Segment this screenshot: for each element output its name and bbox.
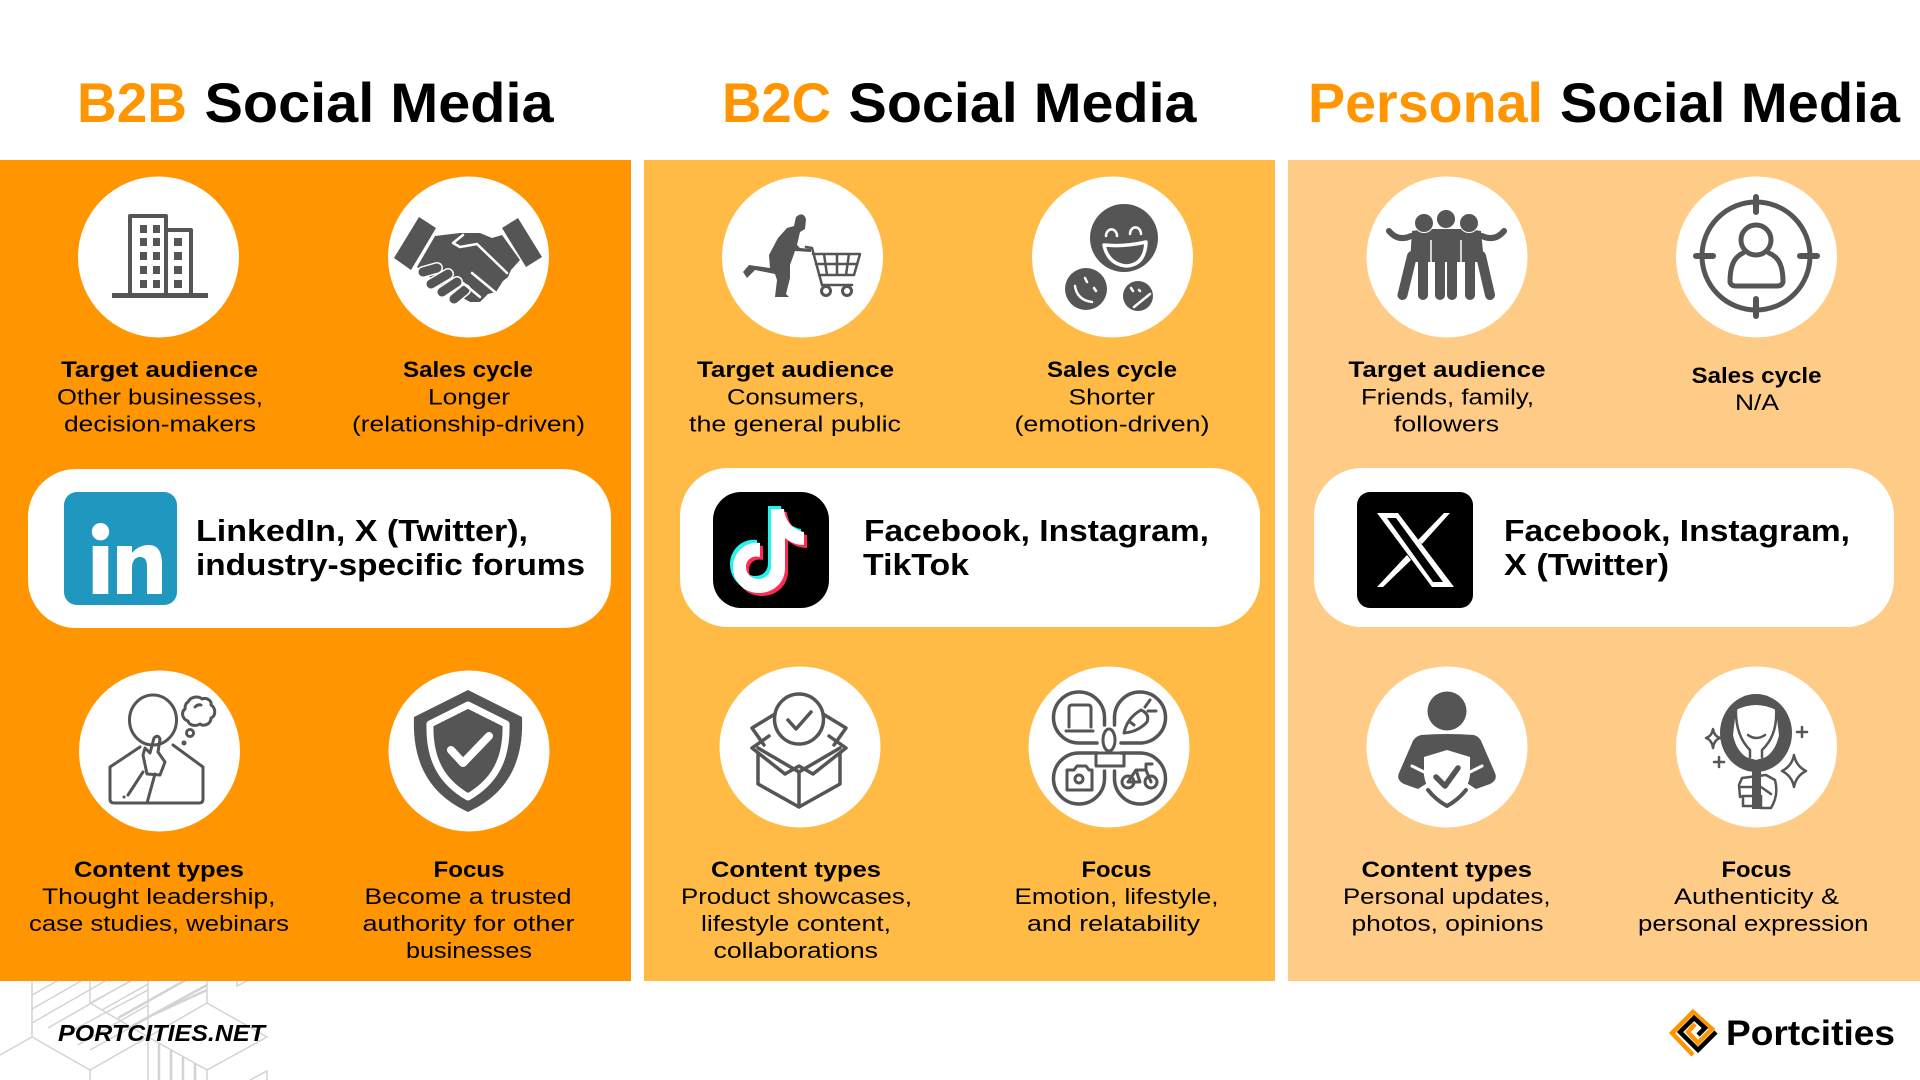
icon: handshake — [388, 176, 549, 338]
text: target audience: Target audience — [61, 357, 258, 382]
panel: B2C — [644, 160, 1275, 981]
text: platforms: X (Twitter) — [1504, 547, 1669, 582]
text: focus: authority for other — [362, 911, 575, 936]
text: content types — [1343, 857, 1550, 936]
icon: shopper with cart — [722, 176, 883, 338]
text: focus: Emotion, lifestyle, — [1014, 884, 1218, 909]
text: target audience — [57, 357, 263, 436]
title: Personal Social Media: Personal — [1308, 71, 1543, 134]
text: focus: Become a trusted — [364, 884, 572, 909]
text: focus: Focus — [434, 857, 504, 882]
text: target audience: followers — [1394, 412, 1499, 436]
text: sales cycle: N/A — [1735, 390, 1779, 415]
text: content types: photos, opinions — [1352, 911, 1544, 936]
text: platforms: industry-specific forums — [196, 547, 585, 582]
text: target audience: Consumers, — [727, 384, 865, 410]
logo: Portcities: Portcities — [1726, 1014, 1895, 1053]
pill: platforms — [28, 469, 611, 628]
logo: Portcities — [1672, 1012, 1895, 1055]
icon: target on person — [1676, 176, 1837, 338]
text: sales cycle: (emotion-driven) — [1014, 412, 1210, 436]
title: Personal Social Media: Social Media — [1560, 71, 1901, 134]
text: target audience: the general public — [689, 412, 901, 436]
icon: thinking person — [79, 670, 240, 832]
text: focus: businesses — [406, 938, 532, 963]
text: sales cycle — [352, 357, 585, 436]
pill: platforms — [1314, 468, 1894, 627]
title: B2C Social Media: B2C — [722, 71, 831, 134]
text: content types: Content types — [1362, 857, 1532, 882]
text: content types: Content types — [74, 857, 244, 882]
text: focus: personal expression — [1638, 911, 1868, 936]
text: focus: Focus — [1722, 857, 1792, 882]
icon: hand mirror — [1676, 666, 1837, 828]
text: platforms: LinkedIn, X (Twitter), — [196, 513, 528, 548]
text: content types: Product showcases, — [681, 884, 912, 909]
icon: office building — [78, 176, 239, 338]
text: content types — [681, 857, 912, 963]
text: content types: collaborations — [714, 938, 878, 963]
text: content types: Personal updates, — [1343, 884, 1550, 909]
text: sales cycle: (relationship-driven) — [352, 412, 585, 436]
text: content types: Thought leadership, — [42, 884, 276, 909]
text: platforms: TikTok — [863, 547, 970, 582]
title: B2B Social Media: B2B — [77, 71, 187, 134]
text: sales cycle — [1014, 357, 1210, 436]
icon: lifestyle person with four interests — [1028, 666, 1190, 828]
icon: smiley faces — [1032, 176, 1193, 338]
text: sales cycle: Sales cycle — [403, 357, 533, 382]
text: sales cycle: Sales cycle — [1047, 357, 1177, 382]
title: B2C Social Media: Social Media — [848, 71, 1197, 134]
text: target audience: Other businesses, — [57, 384, 263, 410]
icon: shield check — [388, 670, 550, 832]
text: focus: Focus — [1082, 857, 1152, 882]
icon: group of friends — [1366, 176, 1528, 338]
text: platforms — [863, 513, 1209, 582]
text: content types: lifestyle content, — [701, 911, 891, 936]
pill: platforms — [680, 468, 1260, 627]
text: focus — [1014, 857, 1218, 936]
text: platforms: Facebook, Instagram, — [864, 513, 1209, 548]
text: focus — [1638, 857, 1868, 936]
text: target audience: Target audience — [697, 357, 894, 382]
text: platforms — [1504, 513, 1850, 582]
text: focus: Authenticity & — [1674, 884, 1839, 909]
footer: website: PORTCITIES.NET — [58, 1020, 267, 1046]
title: B2B Social Media: Social Media — [204, 71, 554, 134]
text: focus: and relatability — [1027, 911, 1201, 936]
icon: product box — [720, 666, 880, 828]
text: target audience: decision-makers — [64, 412, 256, 436]
text: target audience: Friends, family, — [1361, 384, 1534, 410]
text: platforms: Facebook, Instagram, — [1504, 513, 1850, 548]
panel: Personal — [1288, 160, 1920, 981]
panel: B2B — [0, 160, 631, 981]
text: content types: Content types — [711, 857, 881, 882]
text: focus — [362, 857, 575, 963]
title: Personal Social Media — [1308, 71, 1901, 134]
text: platforms — [196, 513, 585, 582]
icon: TikTok — [713, 492, 829, 608]
icon: person holding shield — [1366, 666, 1528, 828]
text: content types: case studies, webinars — [29, 911, 289, 936]
text: sales cycle: Longer — [428, 384, 511, 410]
icon: X — [1357, 492, 1473, 608]
text: target audience: Target audience — [1348, 357, 1546, 382]
text: sales cycle — [1692, 363, 1822, 415]
icon: LinkedIn — [64, 492, 177, 605]
text: sales cycle: Sales cycle — [1692, 363, 1822, 388]
text: sales cycle: Shorter — [1068, 384, 1156, 410]
text: target audience — [1348, 357, 1546, 436]
text: target audience — [689, 357, 901, 436]
text: content types — [29, 857, 289, 936]
